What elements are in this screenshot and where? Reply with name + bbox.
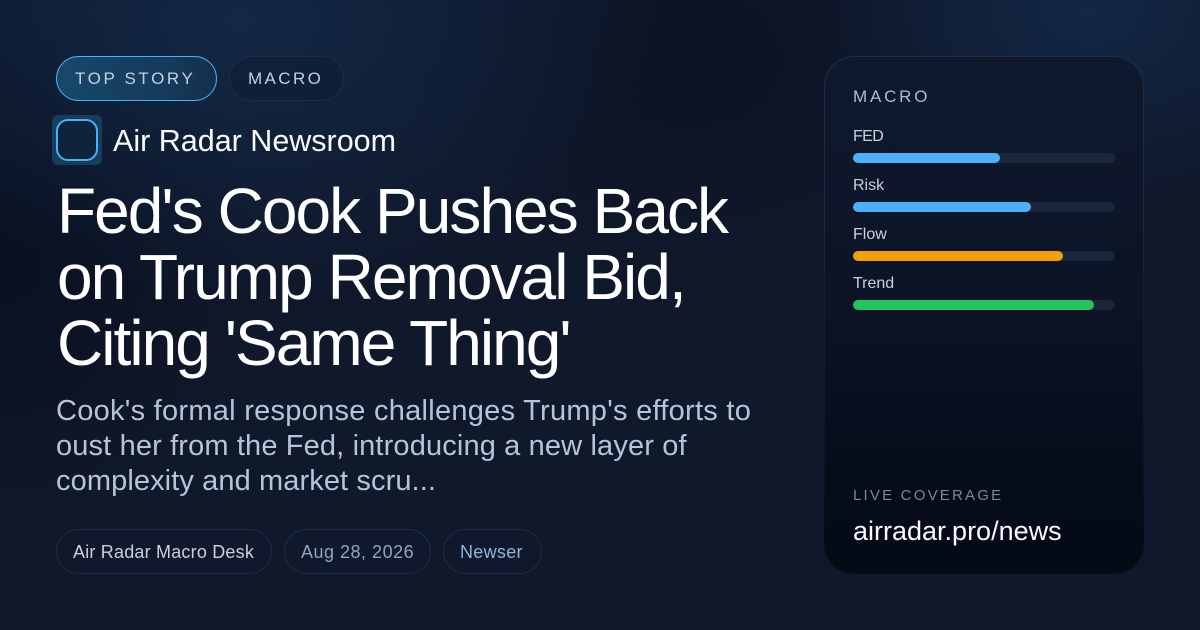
bar: Flow: Flow	[853, 226, 887, 243]
chip: date	[284, 529, 431, 574]
chip: desk	[56, 529, 272, 574]
title: on Trump Removal Bid,	[57, 241, 685, 313]
summary: Cook's formal response challenges Trump's efforts to	[56, 395, 751, 427]
tag: top story: TOP STORY	[75, 69, 195, 88]
summary: oust her from the Fed, introducing a new layer of	[56, 430, 687, 462]
summary	[56, 395, 751, 497]
tag: macro	[229, 56, 344, 101]
chip: source: Newser	[460, 542, 523, 562]
chip: desk: Air Radar Macro Desk	[73, 542, 254, 562]
summary: complexity and market scru...	[56, 465, 436, 497]
chip: date: Aug 28, 2026	[301, 542, 414, 562]
chip: source	[443, 529, 542, 574]
title: Fed's Cook Pushes Back	[57, 175, 727, 247]
title: Citing 'Same Thing'	[57, 307, 570, 379]
site url: airradar.pro/news	[853, 516, 1062, 546]
bar: Risk: Risk	[853, 177, 884, 194]
tag: macro: MACRO	[248, 69, 323, 88]
panel: macro sidebar	[824, 56, 1144, 574]
panel heading: MACRO	[853, 87, 930, 106]
title	[57, 175, 729, 379]
tag: top story	[56, 56, 217, 101]
bar: Trend: Trend	[853, 275, 894, 292]
newsroom name: Air Radar Newsroom	[113, 124, 396, 158]
live coverage label: LIVE COVERAGE	[853, 487, 1003, 504]
bar: FED: FED	[853, 128, 883, 145]
icon: newsroom logo	[52, 115, 102, 165]
